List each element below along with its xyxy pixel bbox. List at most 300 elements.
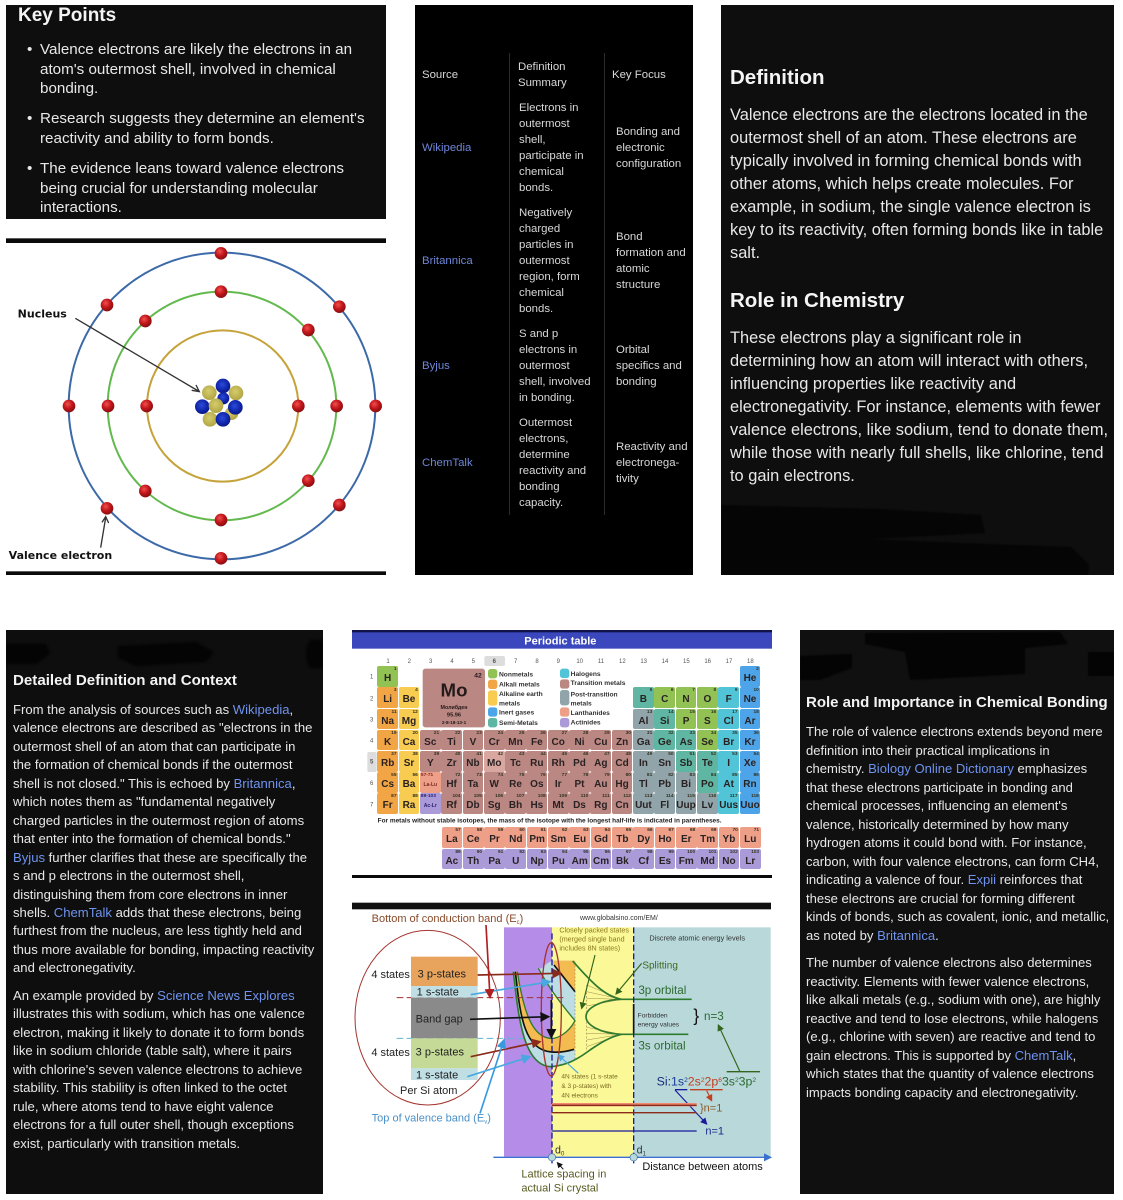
text: definition paragraph: which notes them as "fundamental negatively: [13, 794, 275, 809]
row: Britannica: [422, 207, 686, 315]
diagram labels: Top of valence band (E: [372, 1112, 484, 1124]
diagram labels: d: [555, 1144, 561, 1156]
text: sodium example paragraph: like in sodium chloride (table salt), where it pairs: [13, 1043, 292, 1058]
main element grid: 109: [559, 794, 567, 799]
main element grid: 85: [732, 773, 738, 778]
heading: role and importance: Role and Importance in Chemical Bonding: [806, 694, 1108, 711]
row: Britannica: Bond: [616, 231, 643, 243]
lanthanide and actinide rows: 64: [605, 828, 610, 833]
main element grid: He: [744, 673, 756, 684]
lanthanide and actinide rows: 63: [583, 828, 589, 833]
table header row: Source: [422, 69, 458, 81]
main element grid: Be: [403, 694, 415, 705]
panel: comparison table: [415, 5, 693, 575]
bullet list: Valence electrons are likely the electrons in an: [40, 41, 352, 58]
main element grid: B: [640, 694, 647, 705]
main element grid: Ir: [555, 779, 561, 790]
lanthanide and actinide rows: 71: [754, 828, 759, 833]
main element grid: 53: [732, 752, 738, 757]
main element grid: Cu: [594, 737, 607, 748]
main element grid: Ar: [744, 716, 756, 727]
row: Byjus: outermost: [519, 360, 570, 372]
element detail: Mo: Молибден: [441, 704, 467, 711]
row: ChemTalk: ChemTalk: [422, 457, 473, 469]
diagram labels: Lattice spacing in: [521, 1168, 606, 1180]
main element grid: 111: [602, 794, 610, 799]
row: ChemTalk: tivity: [616, 473, 639, 485]
lanthanide and actinide rows: Er: [681, 834, 692, 845]
main element grid: Ba: [403, 779, 415, 790]
main element grid: 89-103: [421, 794, 436, 799]
main element grid: 75: [519, 773, 524, 778]
text: role paragraph: valence, historically determined by how many: [806, 817, 1069, 832]
text: definition paragraph: distinguishing them from core electrons in inner: [13, 887, 287, 902]
text: role paragraph: chemical processes, influencing an element's: [806, 798, 1067, 813]
main element grid: Mg: [402, 716, 416, 727]
main element grid: 33: [690, 731, 695, 736]
lanthanide and actinide rows: 99: [668, 850, 674, 855]
row: Britannica: atomic: [616, 263, 650, 275]
main element grid: Sr: [404, 758, 414, 769]
legend: Halogens: [571, 671, 601, 678]
lanthanide and actinide rows: 65: [626, 828, 631, 833]
lanthanide and actinide rows: 62: [562, 828, 567, 833]
text: role in chemistry: These electrons play a significant role in: [730, 329, 1022, 347]
element detail: Mo: 2-8-18-13-1: [442, 720, 467, 725]
group numbers: 13: [640, 659, 648, 665]
legend: Inert gases: [499, 709, 534, 716]
main element grid: 108: [538, 794, 546, 799]
main element grid: La-Lu: [423, 782, 437, 788]
group numbers: 5: [472, 659, 476, 665]
row: Wikipedia: Wikipedia: [422, 142, 471, 154]
row: ChemTalk: electronega-: [616, 457, 679, 469]
main element grid: Bi: [681, 779, 691, 790]
main element grid: 46: [583, 752, 588, 757]
main element grid: 40: [455, 752, 460, 757]
text: role in chemistry: electronegativity. For instance, elements with fewer: [730, 398, 1100, 416]
diagram labels: Bottom of conduction band (E: [372, 913, 517, 925]
main element grid: Uut: [635, 800, 652, 811]
lanthanide and actinide rows: 102: [730, 850, 738, 855]
diagram labels: & 3 p-states) with: [561, 1083, 612, 1090]
label: valence electron: [9, 517, 112, 562]
lanthanide and actinide rows: Dy: [637, 834, 650, 845]
main element grid: 16: [711, 710, 716, 715]
lanthanide and actinide rows: 70: [732, 828, 738, 833]
bullet list: Research suggests they determine an element's: [40, 110, 365, 127]
main element grid: 5: [650, 688, 652, 693]
bullet list: •: [27, 160, 32, 177]
group numbers: [386, 659, 754, 665]
period numbers: 6: [370, 781, 374, 787]
main element grid: W: [489, 779, 499, 790]
row: Britannica: Negatively: [519, 207, 572, 219]
row: Wikipedia: configuration: [616, 158, 681, 170]
main element grid: S: [704, 716, 711, 727]
text: definition: key to its reactivity, often forming bonds like in table: [730, 221, 1103, 239]
main element grid: 54: [753, 752, 759, 757]
text: reactivity paragraph: [806, 955, 1100, 1100]
text: role paragraph: these electrons are crucial for forming different: [806, 891, 1075, 906]
image: silicon band diagram: [352, 902, 772, 1195]
label: nucleus: [18, 307, 199, 392]
row: Wikipedia: chemical: [519, 166, 564, 178]
main element grid: 107: [516, 794, 524, 799]
row: Wikipedia: outermost: [519, 118, 570, 130]
group numbers: 14: [662, 659, 669, 665]
main element grid: Db: [466, 800, 480, 811]
diagram labels: 4N electrons: [561, 1092, 599, 1099]
lanthanide and actinide rows: 103: [751, 850, 759, 855]
text: role paragraph: kinds of bonds, such as covalent, ionic, and metallic,: [806, 909, 1109, 924]
main element grid: 114: [666, 794, 674, 799]
diagram labels: energy values: [638, 1022, 680, 1029]
diagram labels: 1: [643, 1151, 647, 1157]
main element grid: Fl: [660, 800, 669, 811]
text: role in chemistry: valence electrons, like sodium, tend to donate them,: [730, 421, 1108, 439]
main element grid: 12: [412, 710, 418, 715]
lanthanide and actinide rows: 95: [583, 850, 589, 855]
diagram labels: ): [520, 913, 523, 925]
text: definition paragraph: s and p electrons in the outermost shell,: [13, 868, 244, 883]
lanthanide and actinide rows: Ho: [658, 834, 672, 845]
group numbers: 16: [704, 659, 712, 665]
main element grid: 84: [711, 773, 716, 778]
group numbers: 3: [429, 659, 433, 665]
label: nucleus: Nucleus: [18, 307, 67, 320]
row: Byjus: in bonding.: [519, 392, 575, 404]
main element grid: 78: [583, 773, 588, 778]
main element grid: 18: [753, 710, 759, 715]
diagram labels: 3s orbital: [638, 1039, 686, 1052]
main element grid: Sn: [658, 758, 671, 769]
main element grid: Lv: [702, 800, 713, 811]
main element grid: Te: [702, 758, 713, 769]
main element grid: 88: [412, 794, 418, 799]
text: definition: outermost shell of an atom. These electrons are: [730, 129, 1077, 147]
label: valence electron: Valence electron: [9, 549, 112, 562]
main element grid: Tl: [639, 779, 648, 790]
main element grid: 1: [394, 667, 397, 672]
main element grid: Rn: [743, 779, 757, 790]
main element grid: 2: [756, 667, 759, 672]
main element grid: Ge: [658, 737, 671, 748]
bullet list: atom's outermost shell, involved in chemical: [40, 61, 336, 78]
main element grid: Ni: [574, 737, 584, 748]
lanthanide and actinide rows: Md: [700, 856, 715, 867]
main element grid: Zn: [616, 737, 628, 748]
period numbers: 7: [370, 803, 374, 809]
panel: role and importance in chemical bonding: [800, 630, 1114, 1194]
diagram labels: v: [484, 1119, 487, 1125]
main element grid: Re: [509, 779, 522, 790]
text: reactivity paragraph: impacts bonding capacity and electronegativity.: [806, 1085, 1078, 1100]
row: Byjus: bonding: [616, 376, 657, 388]
diagram labels: n=3: [704, 1010, 724, 1023]
text: sodium example paragraph: electrons for a full outer shell, though exceptions: [13, 1117, 294, 1132]
lanthanide and actinide rows: Yb: [723, 834, 735, 845]
main element grid: Y: [427, 758, 434, 769]
heading: definition: Definition: [730, 66, 825, 89]
main element grid: As: [680, 737, 692, 748]
text: sodium example paragraph: exist, particularly with transition metals.: [13, 1136, 240, 1151]
main element grid: Bh: [509, 800, 522, 811]
lanthanide and actinide rows: 96: [605, 850, 610, 855]
main element grid: 82: [668, 773, 674, 778]
bullet list: The evidence leans toward valence electrons: [40, 160, 344, 177]
row: Wikipedia: Bonding and: [616, 126, 680, 138]
text: reactivity paragraph: reactivity. Elements with fewer valence electrons,: [806, 974, 1089, 989]
group numbers: 4: [450, 659, 454, 665]
main element grid: Ac-Lr: [424, 803, 437, 809]
main element grid: Uuo: [740, 800, 760, 811]
lanthanide and actinide rows: Pm: [529, 834, 545, 845]
text: definition paragraph: [13, 702, 314, 975]
diagram labels: c: [517, 920, 520, 926]
text: sodium example paragraph: illustrates this with sodium, which has one valence: [13, 1006, 305, 1021]
main element grid: Co: [551, 737, 565, 748]
main element grid: Si: [660, 716, 669, 727]
main element grid: 86: [753, 773, 759, 778]
period numbers: 4: [370, 739, 374, 745]
diagram labels: 2p: [705, 1074, 718, 1088]
text: role in chemistry: while those with nearly full shells, like chlorine, tend: [730, 444, 1104, 462]
main element grid: Ca: [403, 737, 415, 748]
main element grid: 47: [604, 752, 610, 757]
main element grid: 110: [581, 794, 588, 799]
main element grid: K: [384, 737, 391, 748]
bullet list: •: [27, 41, 32, 58]
main element grid: Cs: [381, 779, 394, 790]
main element grid: 9: [735, 688, 738, 693]
text: role in chemistry: to gain electrons.: [730, 467, 855, 485]
text: definition paragraph: the formation of chemical bonds if the outermost: [13, 757, 292, 772]
lanthanide and actinide rows: 61: [541, 828, 546, 833]
lanthanide and actinide rows: Nd: [509, 834, 522, 845]
diagram labels: Splitting: [642, 961, 678, 972]
period numbers: 5: [370, 760, 374, 766]
diagram labels: [372, 913, 763, 1195]
legend: Semi-Metals: [499, 720, 538, 727]
main element grid: Uup: [676, 800, 696, 811]
note: For metals without stable isotopes, the mass of the isotope with the longest half-life is indicated in parentheses.: [378, 817, 722, 824]
main element grid: 20: [412, 731, 418, 736]
main element grid: 37: [391, 752, 397, 757]
period numbers: 1: [370, 675, 374, 681]
main element grid: Zr: [447, 758, 457, 769]
main element grid: Ga: [637, 737, 650, 748]
row: ChemTalk: electrons,: [519, 433, 568, 445]
main element grid: At: [723, 779, 734, 790]
main element grid: 79: [604, 773, 610, 778]
main element grid: 117: [730, 794, 738, 799]
main element grid: 36: [753, 731, 759, 736]
lanthanide and actinide rows: Sm: [551, 834, 566, 845]
main element grid: 28: [583, 731, 588, 736]
text: definition: salt.: [730, 244, 760, 262]
period numbers: 3: [370, 718, 374, 724]
lanthanide and actinide rows: [442, 827, 761, 869]
lanthanide and actinide rows: 60: [519, 828, 525, 833]
text: definition paragraph: that enter into the formation of chemical bonds.": [13, 831, 291, 846]
text: sodium example paragraph: stability. This stability is often linked to the octet: [13, 1080, 287, 1095]
text: role paragraph: as noted by Britannica.: [806, 928, 939, 943]
text: role paragraph: indicating a valence of four. Expii reinforces that: [806, 872, 1082, 887]
diagram labels: Si:1s: [657, 1074, 684, 1088]
text: sodium example paragraph: [13, 988, 305, 1151]
main element grid: 4: [415, 688, 418, 693]
diagram labels: }: [693, 1005, 699, 1025]
main element grid: P: [683, 716, 689, 727]
main element grid: Mt: [552, 800, 564, 811]
text: sodium example paragraph: with chlorine's seven valence electrons to achieve: [13, 1062, 302, 1077]
diagram labels: 2: [684, 1077, 688, 1084]
text: definition paragraph: From the analysis of sources such as Wikipedia,: [13, 702, 293, 717]
main element grid: Hs: [530, 800, 543, 811]
main element grid: Rb: [381, 758, 394, 769]
lanthanide and actinide rows: Cm: [593, 856, 609, 867]
lanthanide and actinide rows: Eu: [573, 834, 586, 845]
main element grid: Au: [594, 779, 607, 790]
main element grid: 35: [732, 731, 738, 736]
legend: metals: [571, 701, 592, 708]
panel: detailed definition and context: [6, 630, 323, 1194]
main element grid: Hf: [446, 779, 457, 790]
bullet list: •: [27, 110, 32, 127]
text: role paragraph: that these electrons participate in bonding and: [806, 780, 1073, 795]
main element grid: Fe: [531, 737, 543, 748]
panel: key points: [6, 5, 386, 219]
nucleus: [195, 379, 243, 427]
diagram labels: Forbidden: [638, 1013, 668, 1020]
lanthanide and actinide rows: 68: [690, 828, 695, 833]
diagram labels: Closely packed states: [559, 926, 629, 934]
text: role in chemistry: influencing properties like reactivity and: [730, 375, 1016, 393]
text: definition: other atoms, which helps create molecules. For: [730, 175, 1073, 193]
main element grid: [377, 666, 760, 814]
diagram labels: 3p orbital: [638, 984, 686, 997]
bullet list: bonding.: [40, 80, 98, 97]
element detail: Mo: 95.96: [447, 712, 461, 718]
period numbers: [370, 675, 374, 809]
main element grid: 23: [476, 731, 482, 736]
main element grid: Se: [701, 737, 713, 748]
main element grid: Ti: [447, 737, 456, 748]
text: role in chemistry: [730, 329, 1108, 485]
text: definition: Valence electrons are the electrons located in the: [730, 106, 1088, 124]
lanthanide and actinide rows: Cf: [638, 856, 649, 867]
per Si atom stack: 4 states: [371, 969, 410, 981]
row: Wikipedia: shell,: [519, 134, 546, 146]
row: Byjus: [422, 328, 682, 404]
main element grid: 34: [711, 731, 716, 736]
group numbers: 1: [386, 659, 390, 665]
main element grid: 43: [519, 752, 524, 757]
bullet list: being crucial for understanding molecular: [40, 180, 318, 197]
diagram labels: 4N states (1 s-state: [561, 1074, 618, 1081]
row: ChemTalk: reactivity and: [519, 465, 586, 477]
diagram labels: }n=1: [700, 1102, 722, 1114]
main element grid: 49: [647, 752, 652, 757]
lanthanide and actinide rows: Th: [467, 856, 479, 867]
row: Britannica: charged: [519, 223, 560, 235]
per Si atom stack: 3 p-states: [416, 1047, 464, 1059]
text: reactivity paragraph: gain electrons. This is supported by ChemTalk,: [806, 1048, 1076, 1063]
main element grid: 26: [540, 731, 546, 736]
group numbers: 10: [576, 659, 584, 665]
text: definition: typically involved in forming chemical bonds with: [730, 152, 1082, 170]
group numbers: 15: [683, 659, 690, 665]
per Si atom stack: 1 s-state: [416, 1069, 458, 1081]
diagram: atom shells: [6, 238, 386, 575]
lanthanide and actinide rows: 89: [455, 850, 461, 855]
main element grid: 55: [391, 773, 397, 778]
bullet list: [27, 41, 365, 216]
arrows: [467, 925, 740, 1124]
row: ChemTalk: [422, 417, 688, 509]
text: role paragraph: carbon, with four valence electrons, can form CH4,: [806, 854, 1099, 869]
main element grid: Al: [638, 716, 648, 727]
table header row: Summary: [518, 77, 567, 89]
legend: Alkaline earth: [499, 691, 543, 698]
row: ChemTalk: determine: [519, 449, 570, 461]
per Si atom stack: Band gap: [416, 1014, 463, 1026]
main element grid: 105: [474, 794, 482, 799]
text: role paragraph: chemistry. Biology Online Dictionary emphasizes: [806, 761, 1087, 776]
group numbers: 12: [619, 659, 626, 665]
main element grid: Ru: [530, 758, 544, 769]
panel: definition and role: [721, 5, 1114, 575]
group numbers: 2: [408, 659, 412, 665]
main element grid: 10: [753, 688, 759, 693]
per Si atom stack: 1 s-state: [417, 987, 459, 999]
main element grid: H: [384, 673, 391, 684]
main element grid: Cr: [489, 737, 500, 748]
lanthanide and actinide rows: Np: [530, 856, 544, 867]
main element grid: Ag: [594, 758, 607, 769]
main element grid: Sc: [424, 737, 436, 748]
main element grid: 14: [668, 710, 674, 715]
row: Britannica: bonds.: [519, 303, 553, 315]
main element grid: 77: [562, 773, 567, 778]
main element grid: 13: [647, 710, 652, 715]
legend: Post-transition: [571, 692, 618, 699]
main element grid: 6: [671, 688, 674, 693]
lanthanide and actinide rows: Pa: [488, 856, 501, 867]
main element grid: 112: [623, 794, 631, 799]
main element grid: 87: [391, 794, 397, 799]
diagram labels: Discrete atomic energy levels: [649, 933, 745, 942]
main element grid: Hg: [615, 779, 629, 790]
main element grid: 32: [668, 731, 674, 736]
text: reactivity paragraph: which states that the quantity of valence electrons: [806, 1066, 1094, 1081]
diagram labels: 0: [561, 1151, 565, 1157]
row: Britannica: outermost: [519, 255, 570, 267]
main element grid: 30: [626, 731, 631, 736]
row: ChemTalk: Reactivity and: [616, 441, 688, 453]
row: Byjus: shell, involved: [519, 376, 591, 388]
main element grid: 19: [391, 731, 397, 736]
main element grid: 50: [668, 752, 674, 757]
main element grid: 25: [519, 731, 524, 736]
row: Britannica: region, form: [519, 271, 580, 283]
main element grid: Tc: [510, 758, 521, 769]
main element grid: 113: [645, 794, 652, 799]
row: Britannica: Britannica: [422, 255, 473, 267]
main element grid: Mo: [487, 758, 501, 769]
diagram labels: d: [637, 1144, 643, 1156]
